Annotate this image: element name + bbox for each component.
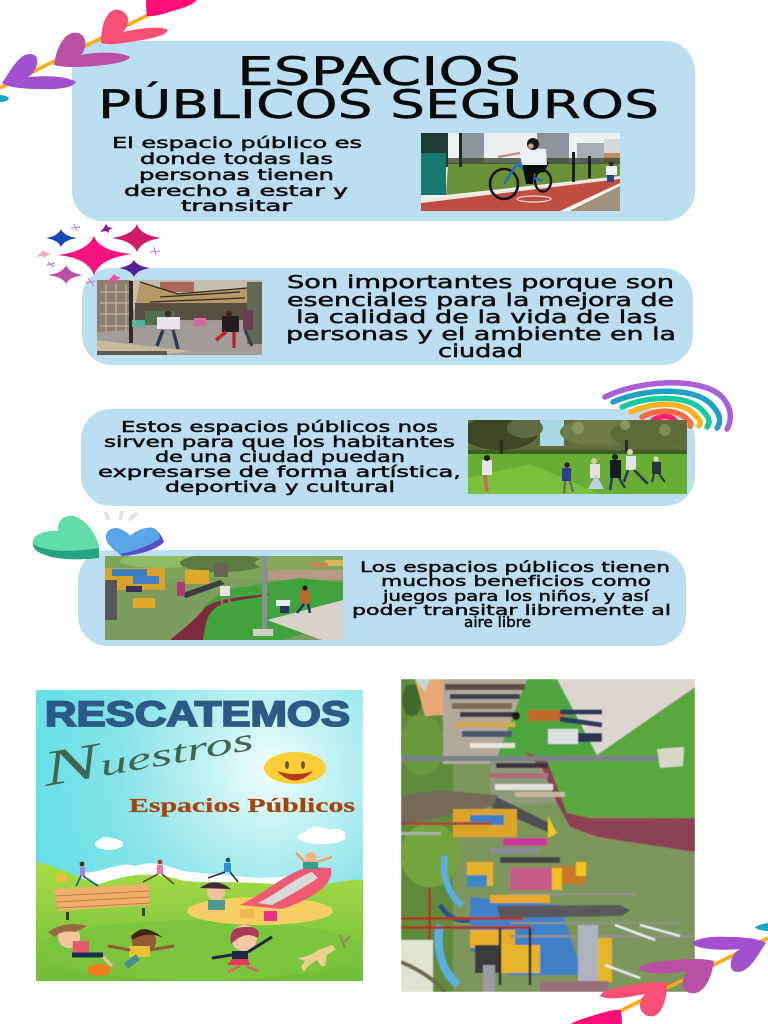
text block: uses: de una ciudad puedan — [155, 448, 405, 466]
photo: playground and green park — [105, 554, 343, 640]
heading: Espacios Públicos Seguros: PÚBLICOS SEGUROS — [98, 81, 659, 128]
photo: cyclist on bike lane — [421, 133, 620, 211]
photo: children in an olive grove — [462, 416, 690, 494]
subtitle: Espacios Públicos: Espacios Públicos — [129, 795, 355, 817]
text block: benefits: juegos para los niños, y así — [382, 589, 650, 605]
text block: benefits: muchos beneficios como — [381, 574, 651, 590]
text block: uses — [98, 418, 461, 496]
teal spot — [755, 923, 768, 931]
heading: Espacios Públicos Seguros — [98, 50, 659, 128]
text block: uses: deportiva y cultural — [165, 478, 395, 496]
teal spot — [0, 95, 9, 102]
text block: uses: sirven para que los habitantes — [104, 433, 455, 451]
panel: importance — [82, 268, 693, 365]
script: Nuestros: N uestros — [37, 705, 257, 797]
text block: importance: personas y el ambiente en la — [286, 325, 676, 345]
table with cloth — [548, 729, 602, 744]
title: Rescatemos: RESCATEMOS — [45, 695, 350, 734]
icon: green 3D heart — [33, 516, 99, 559]
text block: importance: esenciales para la mejora de — [287, 291, 674, 311]
bench — [54, 884, 151, 920]
text block: definition: El espacio público es — [112, 134, 362, 152]
icon: decorative sparkles — [36, 224, 161, 286]
person in orange shirt — [512, 710, 602, 725]
text block: importance: ciudad — [438, 342, 523, 362]
text block: importance: la calidad de la vida de las — [296, 308, 657, 328]
panel: benefits — [78, 550, 686, 646]
hills and meadow — [35, 862, 365, 981]
text block: definition: donde todas las — [140, 150, 333, 168]
kids playing — [48, 852, 350, 976]
icon: blue 3D heart with rays — [105, 511, 164, 556]
text block: benefits: poder transitar libremente al — [352, 603, 671, 619]
icon: rainbow — [605, 383, 730, 429]
text block: benefits: aire libre — [464, 615, 531, 631]
heading: Espacios Públicos Seguros: ESPACIOS — [237, 50, 521, 95]
text block: uses: Estos espacios públicos nos — [121, 418, 438, 436]
text block: definition: transitar — [181, 197, 293, 215]
sand and slide — [187, 867, 333, 925]
text block: uses: expresarse de forma artística, — [98, 463, 461, 481]
panel: title card — [72, 41, 695, 221]
cloud — [95, 827, 346, 850]
text block: benefits — [352, 560, 671, 631]
photo: playground seen sideways — [400, 679, 700, 992]
panel: uses — [81, 409, 695, 506]
lamp post with base — [401, 747, 684, 768]
icon: hearts arrow bottom-right — [571, 923, 768, 1024]
poster: Rescatemos Nuestros Espacios Públicos — [35, 690, 365, 981]
text block: definition: derecho a estar y — [124, 182, 348, 200]
text block: definition: personas tienen — [139, 166, 334, 184]
text block: importance: Son importantes porque son — [287, 273, 674, 293]
sun — [264, 752, 326, 784]
icon: hearts arrow top-left — [0, 0, 197, 102]
crowd band — [445, 684, 565, 797]
text block: importance — [286, 273, 676, 362]
photo: covered public square — [97, 280, 262, 355]
text block: benefits: Los espacios públicos tienen — [360, 560, 670, 576]
text block: definition — [112, 134, 362, 215]
